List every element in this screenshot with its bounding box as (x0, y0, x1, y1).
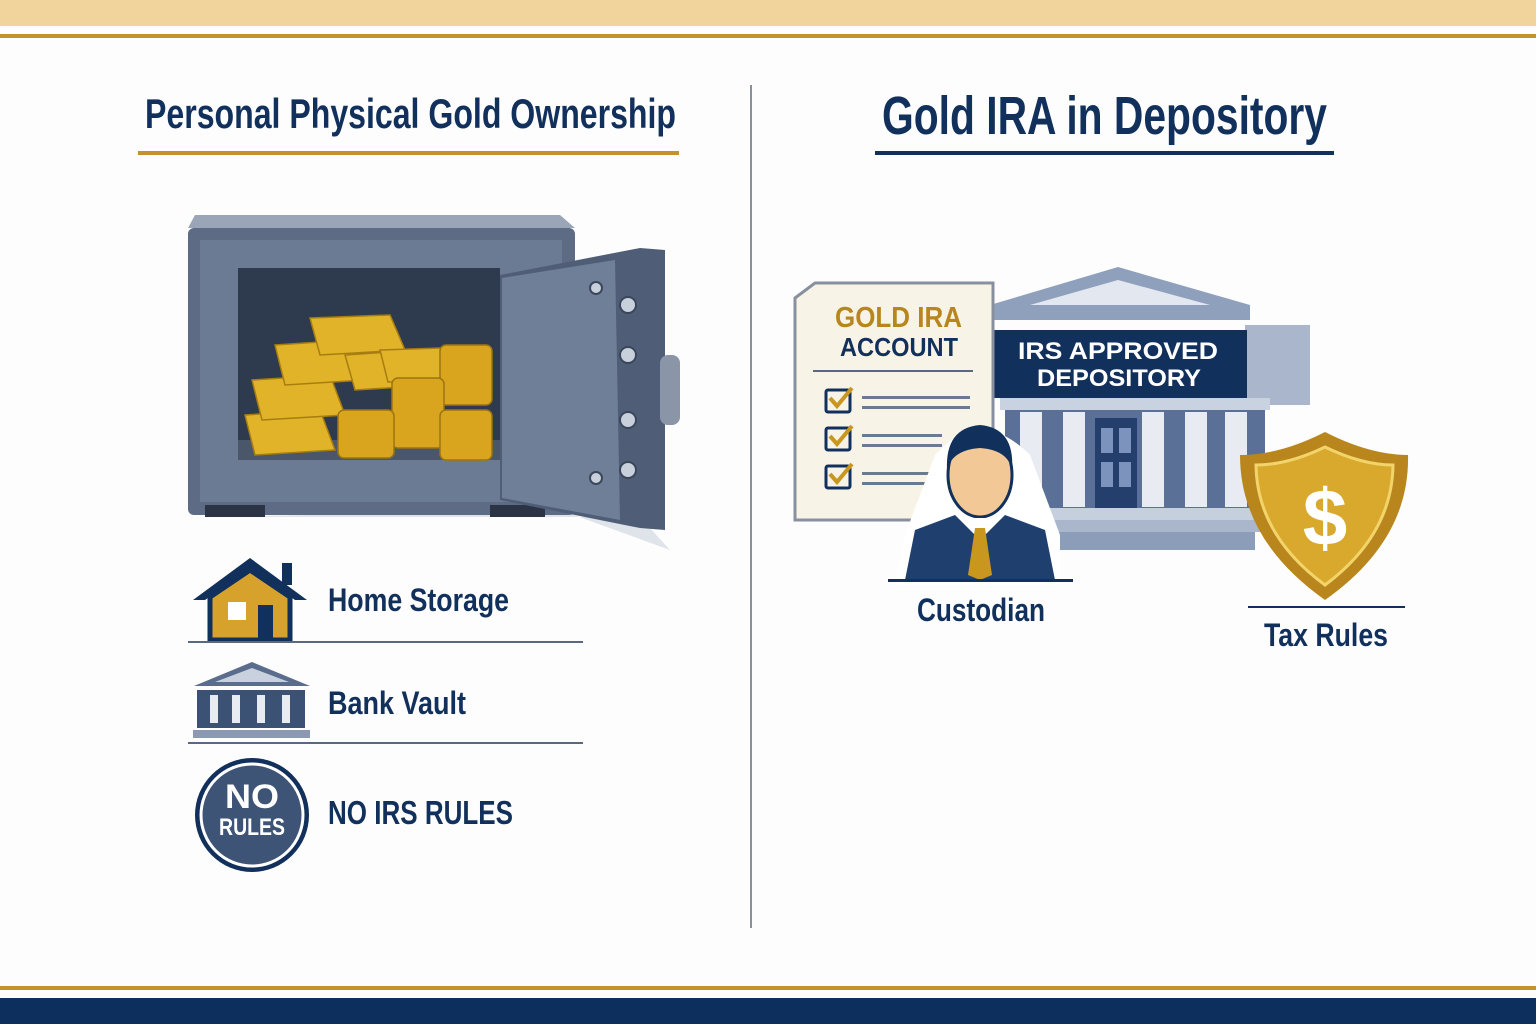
icon: tax shield (1240, 432, 1408, 608)
title: left: Personal Physical Gold Ownership (145, 90, 676, 137)
list item: home storage: Home Storage (328, 582, 509, 618)
title: right (875, 86, 1334, 155)
icon: tax shield: $ (1303, 473, 1347, 562)
icon: no rules badge: NO (225, 778, 279, 816)
list item: bank vault (188, 662, 583, 744)
depository sign: IRS APPROVED (1018, 338, 1218, 365)
list item: no irs rules (195, 758, 513, 872)
list item: home storage (188, 558, 583, 643)
icon: house (193, 558, 307, 640)
icon: no rules badge: RULES (219, 814, 285, 841)
icon: custodian person (888, 425, 1073, 585)
icon: depository building (990, 267, 1310, 550)
icon: gold ira account document: ACCOUNT (840, 332, 958, 362)
icon: gold ira account document: GOLD IRA (835, 302, 962, 334)
depository sign (993, 330, 1247, 398)
icon: gold ira account document (795, 283, 993, 520)
icon: bank (193, 662, 310, 738)
title: right: Gold IRA in Depository (882, 86, 1327, 146)
icon: no rules badge (195, 758, 309, 872)
list item: bank vault: Bank Vault (328, 685, 466, 721)
list item: no irs rules: NO IRS RULES (328, 794, 513, 831)
depository sign: DEPOSITORY (1037, 365, 1201, 392)
title: left (138, 90, 679, 155)
label: tax rules: Tax Rules (1264, 617, 1388, 653)
icon: open safe with gold (188, 215, 680, 550)
label: custodian: Custodian (917, 592, 1045, 628)
